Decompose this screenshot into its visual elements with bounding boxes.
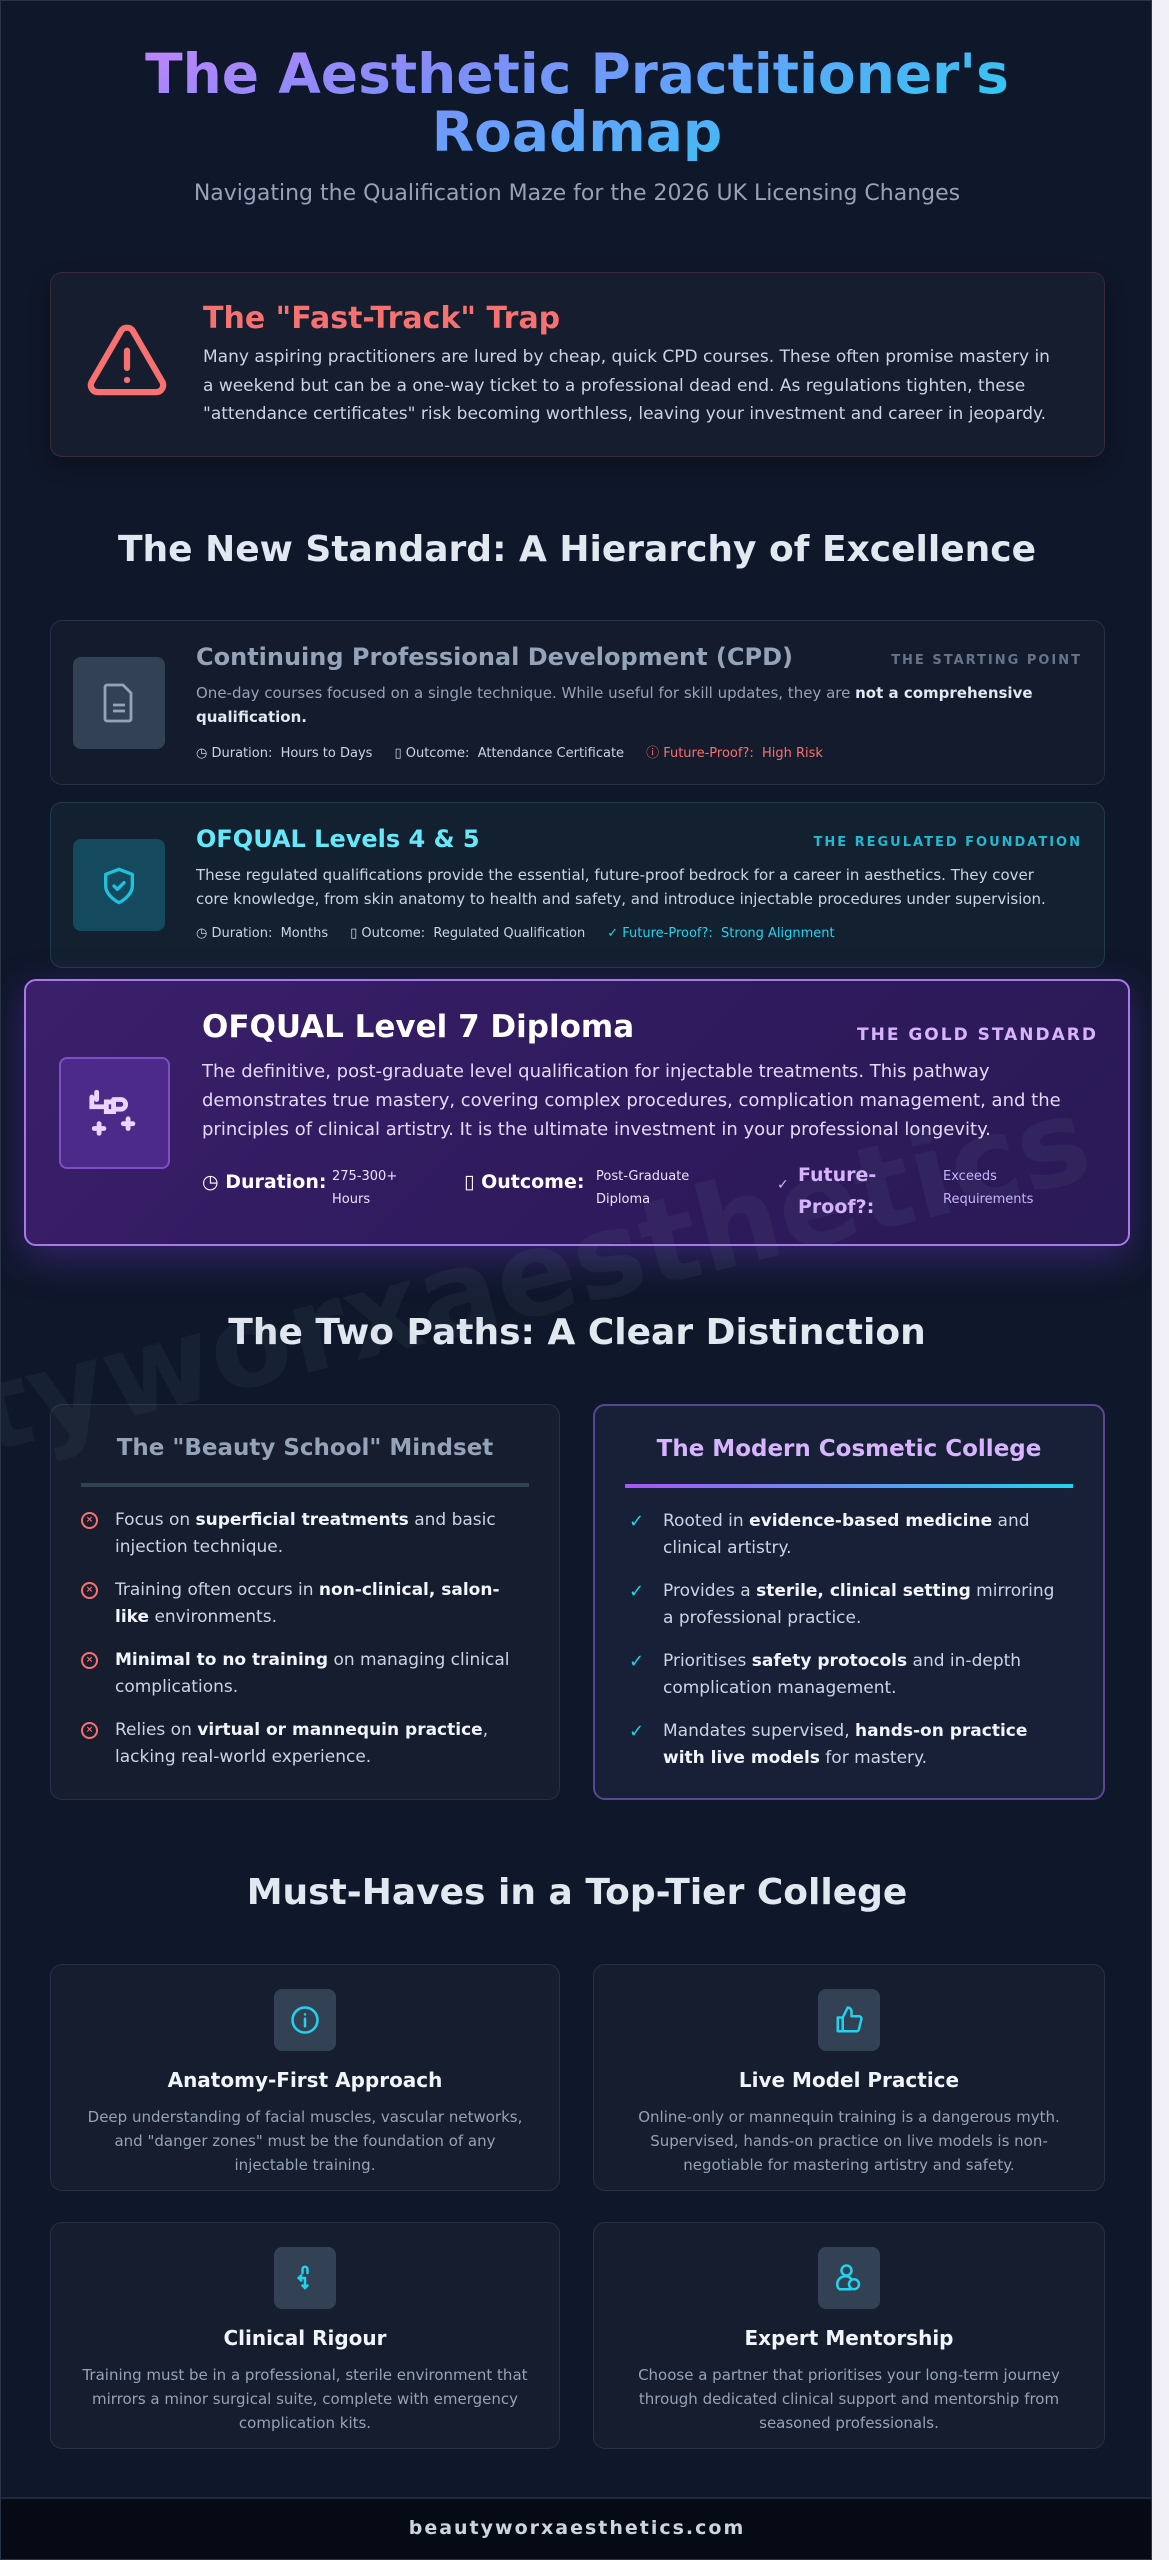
panel: beauty school: [50, 1404, 560, 1800]
icon: person: [818, 2247, 880, 2309]
list: negatives: Focus on superficial treatments and basic injection technique.: [115, 1510, 496, 1557]
L7 meta: ◷ Duration:: [202, 1171, 326, 1193]
card: anatomy: Deep understanding of facial muscles, vascular networks, and "danger zones" must be the foundation of any injectable training.: [88, 2108, 522, 2174]
list: negatives: ×: [86, 1585, 93, 1595]
trap title: The "Fast-Track" Trap: [203, 301, 560, 336]
list: negatives: ×: [86, 1725, 93, 1735]
heading: must-haves: Must-Haves in a Top-Tier College: [247, 1872, 907, 1913]
card: live model: [593, 1964, 1105, 2191]
card: anatomy: Anatomy-First Approach: [168, 2068, 442, 2092]
L7 meta: Hours: [332, 1192, 370, 1207]
heading: two paths: The Two Paths: A Clear Distinction: [228, 1312, 926, 1353]
list: negatives: Relies on virtual or mannequin practice, lacking real-world experience.: [115, 1720, 488, 1767]
L7 meta: Requirements: [943, 1192, 1033, 1207]
L7 meta: ▯ Outcome:: [464, 1171, 584, 1193]
list: positives: Rooted in evidence-based medicine and clinical artistry.: [663, 1511, 1030, 1558]
title: The Aesthetic Practitioner's: [145, 42, 1009, 106]
icon: shield: [73, 839, 165, 931]
card: mentorship: Choose a partner that prioritises your long-term journey through dedicated clinical support and mentorship from seasoned professionals.: [638, 2366, 1060, 2432]
list: positives: Prioritises safety protocols and in-depth complication management.: [663, 1651, 1021, 1698]
L7 meta: [202, 1164, 1033, 1218]
panel: modern college: [593, 1404, 1105, 1800]
icon: document: [73, 657, 165, 749]
list: negatives: ×: [86, 1515, 93, 1525]
L7 meta: 275-300+: [332, 1169, 397, 1184]
list: negatives: [81, 1510, 509, 1767]
list: positives: [629, 1511, 1054, 1768]
icon: thumbs up: [818, 1989, 880, 2051]
tag: THE STARTING POINT: [891, 653, 1082, 668]
L4-5 meta: ◷ Duration: Months ▯ Outcome: Regulated Qualification ✓ Future-Proof?: Strong Alignment: [196, 926, 835, 941]
icon: syringe sparkle: [59, 1057, 170, 1169]
card: mentorship: [593, 2222, 1105, 2449]
panel: level 7: [24, 979, 1130, 1246]
L7 meta: Proof?:: [798, 1196, 874, 1218]
list: positives: Provides a sterile, clinical setting mirroring a professional practice.: [663, 1581, 1054, 1628]
footer: [1, 2497, 1153, 2560]
icon: flow: [274, 2247, 336, 2309]
list: negatives: Training often occurs in non-clinical, salon-like environments.: [115, 1580, 500, 1627]
L4-5 title: OFQUAL Levels 4 & 5: [196, 825, 480, 853]
L4-5 text: These regulated qualifications provide the essential, future-proof bedrock for a career in aesthetics. They cover core knowledge, from skin anatomy to health and safety, and introduce injectable procedures under supervision.: [196, 866, 1046, 908]
icon: info: [274, 1989, 336, 2051]
footer: beautyworxaesthetics.com: [409, 2517, 745, 2539]
card: mentorship: Expert Mentorship: [744, 2326, 954, 2350]
L7 meta: Post-Graduate: [596, 1169, 689, 1184]
list: positives: ✓: [629, 1581, 644, 1602]
tag: THE GOLD STANDARD: [857, 1025, 1098, 1045]
L7 meta: ✓: [777, 1177, 789, 1193]
CPD text: One-day courses focused on a single technique. While useful for skill updates, they are not a comprehensive qualification.: [196, 684, 1033, 726]
list: positives: ✓: [629, 1721, 644, 1742]
panel: fast-track trap: [50, 272, 1105, 457]
icon: warning triangle: [88, 324, 166, 396]
L7 meta: Exceeds: [943, 1169, 997, 1184]
card: clinical rigour: Training must be in a professional, sterile environment that mirrors a minor surgical suite, complete with emergency complication kits.: [82, 2366, 528, 2432]
L7 meta: Diploma: [596, 1192, 650, 1207]
CPD title: Continuing Professional Development (CPD): [196, 643, 793, 671]
heading: new standard: The New Standard: A Hierarchy of Excellence: [118, 529, 1036, 570]
L7 text: The definitive, post-graduate level qualification for injectable treatments. This pathway demonstrates true mastery, covering complex procedures, complication management, and the principles of clinical artistry. It is the ultimate investment in your professional longevity.: [202, 1061, 1061, 1140]
panel: CPD: [50, 620, 1105, 785]
subtitle: Navigating the Qualification Maze for the 2026 UK Licensing Changes: [194, 181, 960, 206]
tag: THE REGULATED FOUNDATION: [813, 835, 1082, 850]
heading: The Modern Cosmetic College: [657, 1436, 1041, 1462]
card: clinical rigour: [50, 2222, 560, 2449]
card: live model: Online-only or mannequin training is a dangerous myth. Supervised, hands-on practice on live models is non-negotiable for mastering artistry and safety.: [638, 2108, 1060, 2174]
L7 title: OFQUAL Level 7 Diploma: [202, 1009, 634, 1045]
list: negatives: ×: [86, 1655, 93, 1665]
title: Roadmap: [432, 100, 722, 164]
title: [1, 45, 1153, 161]
panel: level 4 & 5: [50, 802, 1105, 968]
card: clinical rigour: Clinical Rigour: [223, 2326, 387, 2350]
card: anatomy: [50, 1964, 560, 2191]
list: positives: ✓: [629, 1511, 644, 1532]
heading: The "Beauty School" Mindset: [117, 1435, 493, 1461]
list: negatives: Minimal to no training on managing clinical complications.: [115, 1650, 509, 1697]
card: live model: Live Model Practice: [739, 2068, 959, 2092]
L7 meta: Future-: [798, 1164, 876, 1186]
CPD meta: ◷ Duration: Hours to Days ▯ Outcome: Attendance Certificate ⓘ Future-Proof?: High Risk: [196, 746, 823, 761]
list: positives: ✓: [629, 1651, 644, 1672]
trap text: Many aspiring practitioners are lured by cheap, quick CPD courses. These often promise mastery in a weekend but can be a one-way ticket to a professional dead end. As regulations tighten, these "attendance certificates" risk becoming worthless, leaving your investment and career in jeopardy.: [203, 347, 1050, 424]
list: positives: Mandates supervised, hands-on practice with live models for mastery.: [663, 1721, 1027, 1768]
